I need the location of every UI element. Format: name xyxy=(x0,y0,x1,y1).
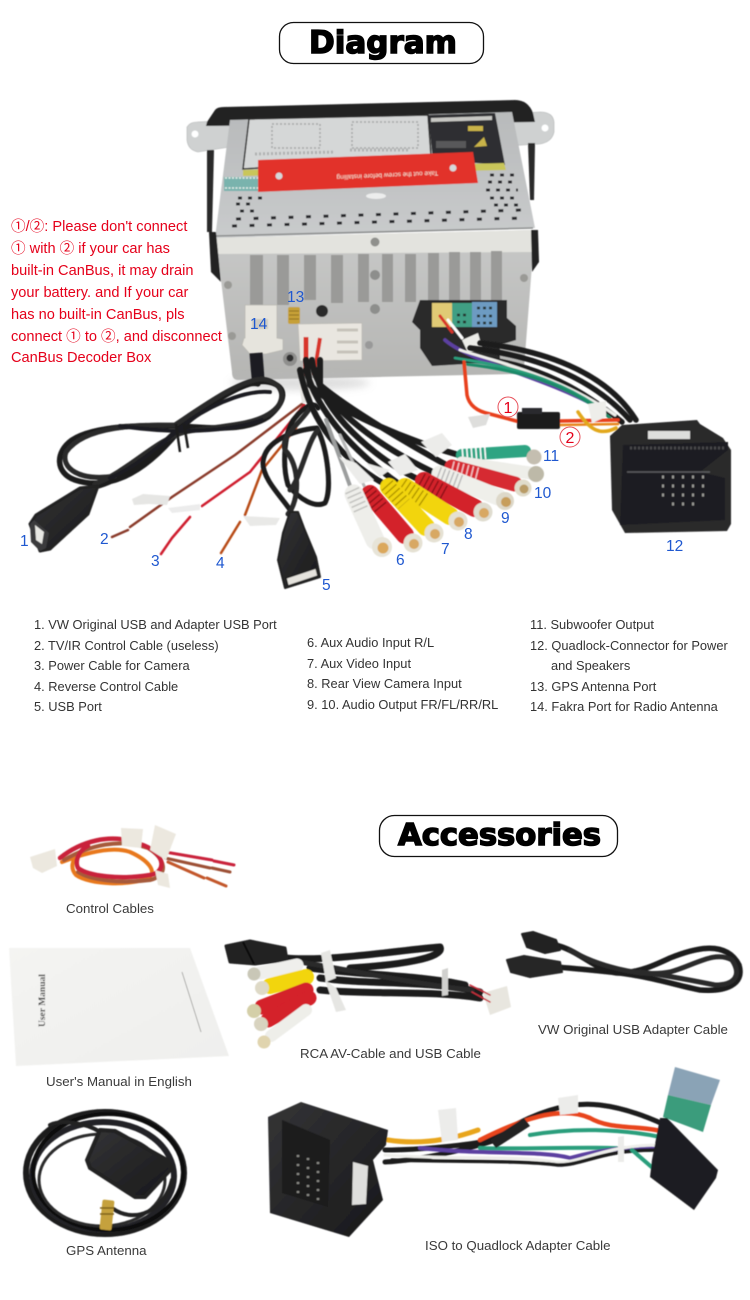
blue callout numbers: 12 xyxy=(666,538,683,555)
blue callout numbers: 7 xyxy=(441,541,450,558)
heading: Accessories: Accessories xyxy=(398,818,601,853)
photo: RCA plugs and their cables xyxy=(300,360,544,557)
legend: items 1-5: 1. VW Original USB and Adapter USB Port xyxy=(34,617,277,632)
photo: head unit rear view xyxy=(187,100,554,380)
connector pins xyxy=(662,477,705,504)
black cable fan xyxy=(300,360,462,487)
legend: items 6-10: 7. Aux Video Input xyxy=(307,656,411,671)
legend: items 6-10: 6. Aux Audio Input R/L xyxy=(307,635,434,650)
legend: items 1-5: 4. Reverse Control Cable xyxy=(34,679,178,694)
warning note about CanBus connection: CanBus Decoder Box xyxy=(11,350,152,366)
top plate xyxy=(215,112,535,238)
blue callout numbers: 10 xyxy=(534,485,552,502)
legend: items 1-5: 2. TV/IR Control Cable (useless) xyxy=(34,638,219,653)
blue callout numbers: 9 xyxy=(501,510,510,527)
circled marker 1: 1 xyxy=(504,400,513,417)
plug 6 red xyxy=(367,491,422,552)
blue callout numbers xyxy=(20,289,683,594)
second USB loop xyxy=(263,405,328,513)
legend: items 11-14: 11. Subwoofer Output xyxy=(530,617,654,632)
green socket xyxy=(452,303,472,327)
blue callout numbers: 6 xyxy=(396,552,405,569)
circled marker 2 xyxy=(560,427,580,447)
yellow socket xyxy=(432,303,452,327)
black socket panel xyxy=(412,300,516,366)
blue callout numbers: 14 xyxy=(250,316,268,333)
mounting ears xyxy=(187,112,554,152)
ventilation slots xyxy=(250,251,502,305)
quadlock connector xyxy=(610,420,731,533)
photo: GPS antenna xyxy=(26,1112,184,1234)
USB connector 1 xyxy=(30,486,98,551)
legend: items 6-10: 9. 10. Audio Output FR/FL/RR/RL xyxy=(307,697,498,712)
warning note about CanBus connection: ① with ② if your car has xyxy=(11,240,170,257)
blue callout numbers: 5 xyxy=(322,577,331,594)
plug 11 green xyxy=(462,450,542,464)
legend: items 11-14: and Speakers xyxy=(551,658,630,673)
heading: Diagram xyxy=(280,22,484,64)
fakra port housing xyxy=(242,305,283,354)
heading: Diagram: Diagram xyxy=(309,25,457,61)
teal connector row xyxy=(224,177,258,191)
blue callout numbers: 4 xyxy=(216,555,225,572)
plug 7 yellow front xyxy=(387,485,444,542)
orange wire and inline connector xyxy=(464,362,618,422)
photo: ISO to quadlock adapter cable xyxy=(268,1067,720,1237)
photo: user manual: User Manual xyxy=(38,974,48,1027)
blue callout numbers: 2 xyxy=(100,531,109,548)
warning note about CanBus connection: ①/②: Please don't connect xyxy=(11,218,187,235)
warning note about CanBus connection xyxy=(11,218,222,366)
red removal sticker xyxy=(258,152,478,192)
wire tags xyxy=(132,494,170,505)
photo: VW original USB adapter cable xyxy=(507,932,740,990)
blue callout numbers: 8 xyxy=(464,526,473,543)
USB connector 5 xyxy=(278,512,320,588)
blue callout numbers: 3 xyxy=(151,553,160,570)
caption: ISO to quadlock adapter: ISO to Quadlock Adapter Cable xyxy=(425,1238,611,1253)
legend: items 1-5 xyxy=(34,617,277,714)
photo: RCA AV cable and USB cable xyxy=(226,941,511,1048)
caption: control cables: Control Cables xyxy=(66,901,154,916)
circled marker 1 xyxy=(498,397,518,417)
warning note about CanBus connection: has no built-in CanBus, pls xyxy=(11,307,185,323)
blue callout numbers: 11 xyxy=(543,448,559,465)
black warning label xyxy=(428,113,505,165)
photo: left USB cable and control wires xyxy=(30,353,370,588)
photo: control cables xyxy=(30,825,234,888)
legend: items 1-5: 3. Power Cable for Camera xyxy=(34,658,190,673)
caption: GPS antenna: GPS Antenna xyxy=(66,1243,147,1258)
plug 7 yellow rear xyxy=(402,485,468,530)
legend: items 6-10 xyxy=(307,635,498,712)
coiled USB cable xyxy=(60,382,283,488)
antenna lead from fakra port xyxy=(256,353,258,378)
gold GPS port xyxy=(288,307,300,324)
black top bezel xyxy=(206,100,535,126)
legend: items 1-5: 5. USB Port xyxy=(34,699,102,714)
photo: head unit rear view: Take out the screw before installing xyxy=(336,169,438,180)
ventilation holes xyxy=(232,218,524,226)
brown, red and orange wires xyxy=(112,404,302,537)
caption: VW USB adapter: VW Original USB Adapter Cable xyxy=(538,1022,728,1037)
paper tags xyxy=(339,433,452,484)
grey cable to white plug xyxy=(326,420,353,494)
wiring bundle xyxy=(470,343,636,422)
photo: user manual xyxy=(9,948,229,1066)
blue callout numbers: 13 xyxy=(287,289,304,306)
caption: user manual: User's Manual in English xyxy=(46,1074,192,1089)
side clips xyxy=(209,230,539,282)
rear face panel xyxy=(216,230,533,380)
warning note about CanBus connection: connect ① to ②, and disconnect xyxy=(11,328,222,345)
legend: items 11-14: 12. Quadlock-Connector for Power xyxy=(530,638,728,653)
legend: items 6-10: 8. Rear View Camera Input xyxy=(307,676,462,691)
blue socket xyxy=(472,302,497,327)
grey specification label xyxy=(243,115,431,169)
legend: items 11-14: 14. Fakra Port for Radio Antenna xyxy=(530,699,719,714)
legend: items 11-14: 13. GPS Antenna Port xyxy=(530,679,657,694)
plug 10 white xyxy=(462,463,544,482)
white clips xyxy=(588,401,606,423)
legend: items 11-14 xyxy=(530,617,728,714)
blue callout numbers: 1 xyxy=(20,533,29,550)
photo: quadlock harness and connector xyxy=(445,340,731,533)
plug 6 white xyxy=(352,490,392,557)
plug 8 red xyxy=(421,480,492,522)
plug 9 white xyxy=(438,474,514,510)
circled marker 2: 2 xyxy=(566,430,575,447)
warning note about CanBus connection: built-in CanBus, it may drain xyxy=(11,263,194,279)
white multi-pin connector xyxy=(298,323,362,361)
warning note about CanBus connection: your battery. and If your car xyxy=(11,285,189,301)
plug 10 red xyxy=(452,467,532,496)
caption: RCA cable: RCA AV-Cable and USB Cable xyxy=(300,1046,481,1061)
